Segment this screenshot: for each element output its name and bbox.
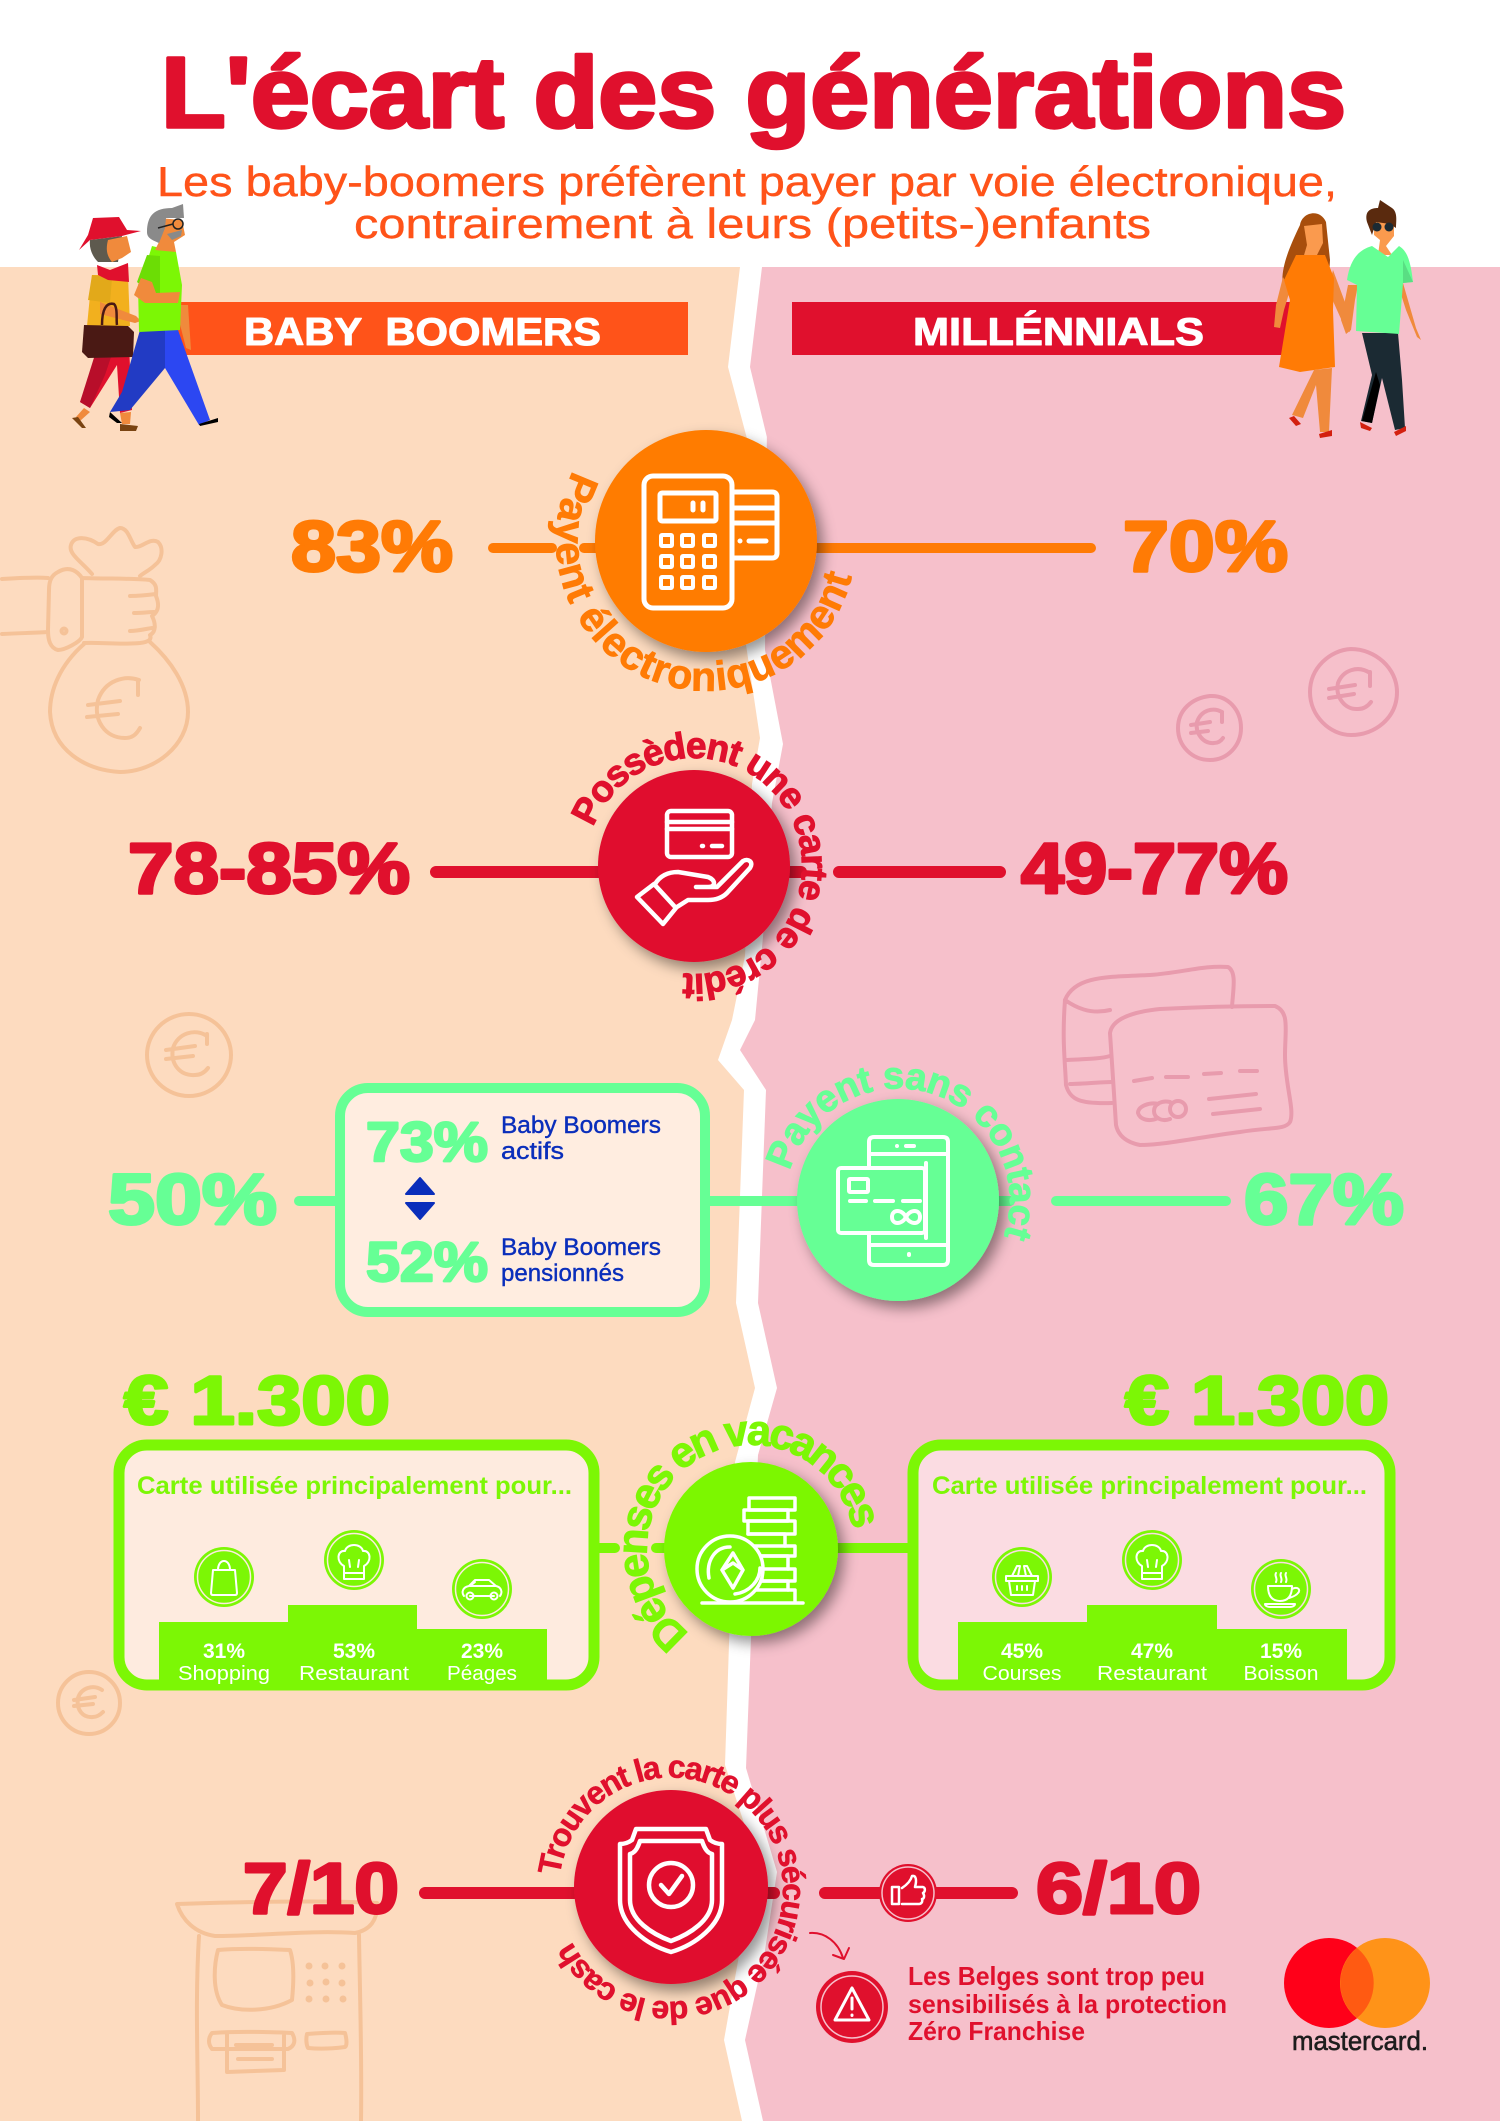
- panel: active vs retired: [340, 1088, 705, 1312]
- decoration: euro coin right small: [1178, 696, 1241, 760]
- circle: orange: [595, 430, 817, 652]
- icon: warning: [816, 1971, 888, 2043]
- icon: contactless phone and card: [838, 1137, 948, 1265]
- curved label: Possèdent une carte de crédit: [570, 731, 826, 1002]
- value 78-85%: 78-85%: [128, 830, 410, 909]
- podium bars: [958, 1605, 1347, 1690]
- callout: zéro franchise: Les Belges sont trop peu: [908, 1961, 1205, 1991]
- bar labels: 47%: [1131, 1640, 1173, 1663]
- panel: baby boomers card usage: [119, 1445, 594, 1690]
- value right: € 1.300: [1125, 1362, 1389, 1439]
- value 52%: 52%: [366, 1230, 488, 1293]
- value 73%: 73%: [366, 1110, 488, 1173]
- decoration: euro coin lower left: [58, 1672, 120, 1734]
- title: L'écart des générations: [161, 37, 1346, 149]
- icon: payment terminal: [644, 476, 777, 608]
- icon: coffee cup: [1251, 1559, 1311, 1619]
- value 50%: 50%: [108, 1161, 277, 1240]
- subtitle: contrairement à leurs (petits-)enfants: [354, 200, 1151, 247]
- illustration: millennial couple: [1274, 200, 1421, 438]
- banner: millennials: MILLÉNNIALS: [913, 310, 1204, 354]
- curved label: Trouvent la carte plus sécurisée que de le cash: [538, 1758, 806, 2026]
- value 7/10: 7/10: [243, 1850, 399, 1929]
- subtitle: Les baby-boomers préfèrent payer par voie électronique,: [157, 158, 1337, 205]
- podium bars: [159, 1605, 547, 1690]
- icon: coins and compass: [697, 1498, 803, 1603]
- row 1: payent électroniquement: [291, 428, 1288, 694]
- circle: lime: [664, 1462, 838, 1636]
- label: baby boomers actifs: actifs: [501, 1138, 564, 1165]
- bar labels: Restaurant: [299, 1663, 409, 1685]
- callout: zéro franchise: Zéro Franchise: [908, 2016, 1085, 2046]
- woman: [72, 217, 141, 431]
- bar labels: Courses: [982, 1663, 1062, 1685]
- circle: red: [574, 1790, 768, 1984]
- panel: millennials background: [740, 267, 1500, 2121]
- illustration: baby boomer couple: [72, 204, 218, 431]
- icon: hand holding card: [637, 811, 751, 924]
- panel heading: Carte utilisée principalement pour...: [932, 1472, 1367, 1500]
- bar labels: [178, 1640, 517, 1685]
- value 6/10: 6/10: [1036, 1850, 1201, 1929]
- banner: baby boomers: [177, 302, 688, 355]
- logo: mastercard: [1284, 1938, 1430, 2056]
- icon: shopping bag: [194, 1547, 254, 1607]
- bar labels: Péages: [447, 1663, 517, 1685]
- connector lines: [594, 1543, 913, 1553]
- bar labels: 15%: [1260, 1640, 1302, 1663]
- woman: [1274, 213, 1350, 438]
- decoration: ATM: [177, 1901, 377, 2121]
- arrow: [810, 1933, 849, 1959]
- label: baby boomers actifs: Baby Boomers: [501, 1112, 661, 1139]
- banner: baby boomers: BABY BOOMERS: [244, 311, 601, 354]
- curved label: Dépenses en vacances: [623, 1421, 874, 1654]
- bar labels: 23%: [461, 1640, 503, 1663]
- decoration: money bag: [2, 528, 188, 772]
- value 83%: 83%: [291, 508, 453, 587]
- banner: millennials: [792, 302, 1302, 355]
- row 4: dépenses en vacances: [114, 1362, 1396, 1690]
- value 49-77%: 49-77%: [1021, 830, 1288, 909]
- icon: up and down arrows: [406, 1178, 434, 1219]
- bar labels: Shopping: [178, 1663, 270, 1685]
- row 3: payent sans contact: [108, 1068, 1404, 1317]
- icon: chef hat: [324, 1530, 384, 1590]
- bar labels: 53%: [333, 1640, 375, 1663]
- decoration: credit cards: [1064, 967, 1291, 1145]
- connector lines: [425, 1887, 1012, 1899]
- label: baby boomers pensionnés: Baby Boomers: [501, 1234, 661, 1261]
- panel heading: Carte utilisée principalement pour...: [137, 1472, 572, 1500]
- label: baby boomers pensionnés: pensionnés: [501, 1260, 624, 1287]
- connector lines: [299, 1196, 1226, 1206]
- curved label: Payent sans contact: [765, 1068, 1033, 1242]
- callout: zéro franchise: sensibilisés à la protection: [908, 1989, 1227, 2019]
- connector lines: [493, 543, 1091, 553]
- logo: mastercard: mastercard.: [1292, 2026, 1428, 2056]
- bar labels: Boisson: [1244, 1663, 1318, 1685]
- value 67%: 67%: [1244, 1161, 1404, 1240]
- man: [1341, 200, 1421, 436]
- row 5: trouvent la carte plus sécurisée: [243, 1758, 1227, 2046]
- curved label: Payent électroniquement: [548, 472, 852, 694]
- value 70%: 70%: [1123, 508, 1288, 587]
- circle: red: [598, 770, 790, 962]
- label: baby boomers pensionnés: [501, 1234, 661, 1287]
- decoration: euro coin right large: [1310, 649, 1397, 735]
- circle: mint: [797, 1099, 999, 1301]
- icon: basket: [992, 1547, 1052, 1607]
- icon: chef hat: [1122, 1530, 1182, 1590]
- man: [109, 204, 218, 426]
- icon: car: [452, 1559, 512, 1619]
- row 2: possèdent une carte de crédit: [128, 731, 1288, 1002]
- icon: thumbs up: [879, 1864, 937, 1922]
- callout: zéro franchise: [908, 1961, 1227, 2046]
- value left: € 1.300: [124, 1362, 390, 1439]
- panel: millennials card usage: [913, 1445, 1390, 1690]
- bar labels: [982, 1640, 1318, 1685]
- icon: security shield: [620, 1829, 722, 1952]
- bar labels: 45%: [1001, 1640, 1043, 1663]
- decoration: euro coin left: [147, 1014, 231, 1096]
- subtitle: [157, 158, 1337, 247]
- bar labels: Restaurant: [1097, 1663, 1207, 1685]
- label: baby boomers actifs: [501, 1112, 661, 1165]
- connector lines: [436, 866, 1000, 878]
- bar labels: 31%: [203, 1640, 245, 1663]
- panel: baby boomers background: [0, 267, 760, 2121]
